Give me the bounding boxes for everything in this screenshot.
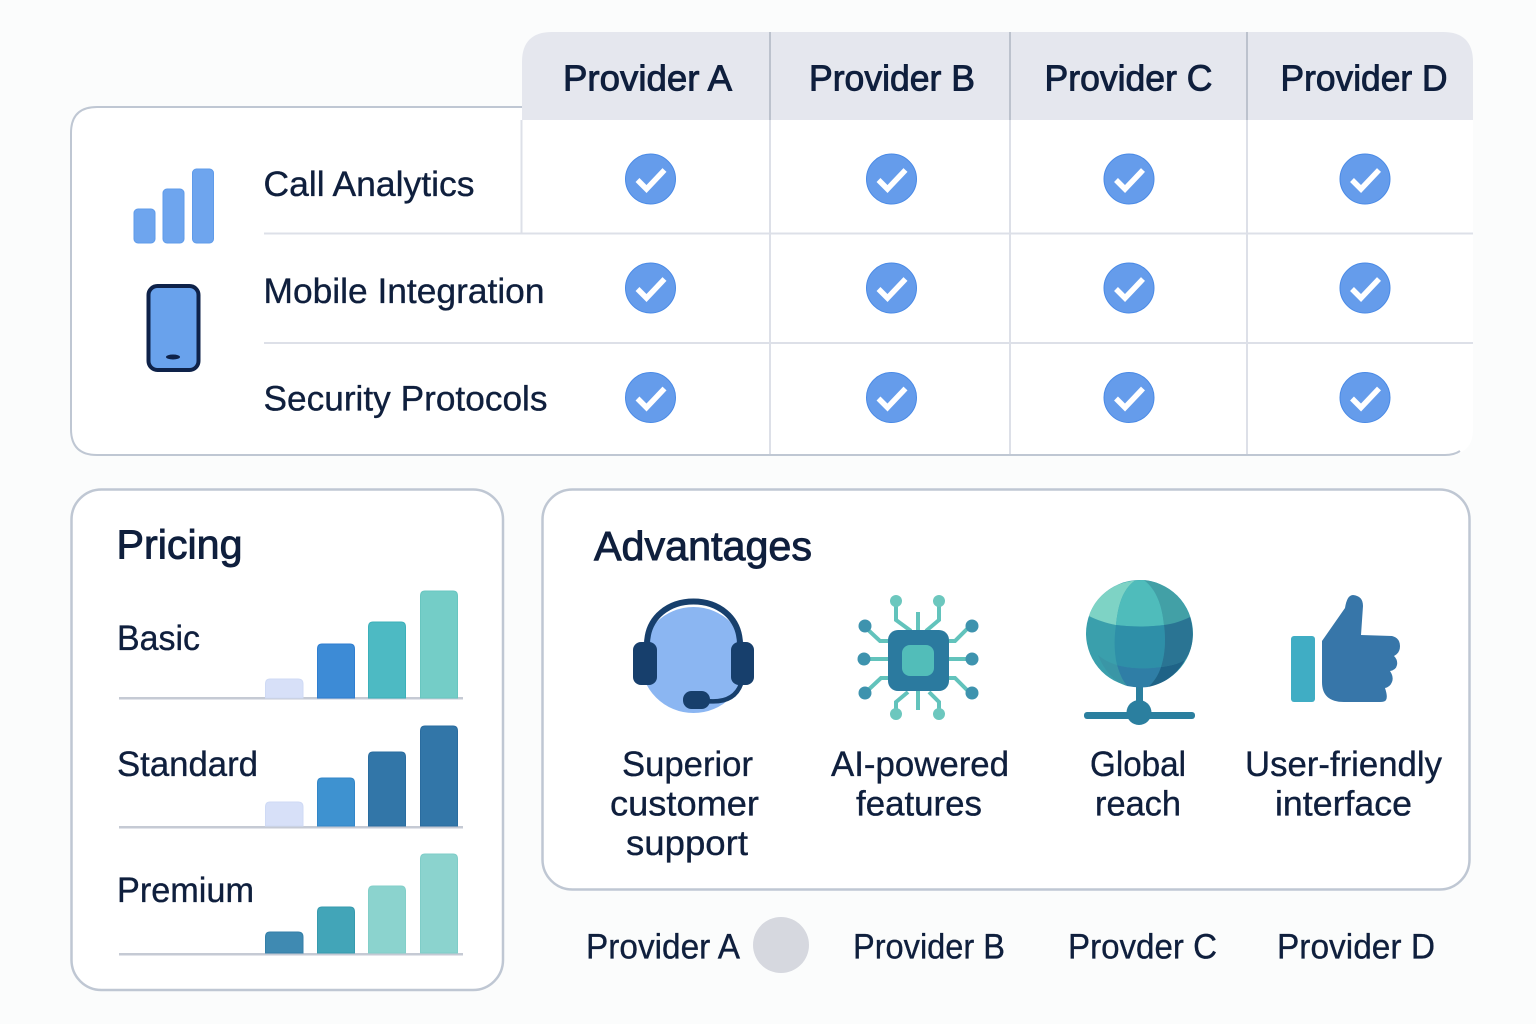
caption: user-friendly interface	[1245, 745, 1442, 824]
legend: Provider B	[853, 928, 1005, 966]
icon: signal bars	[134, 169, 214, 243]
row labels: Security Protocols	[264, 380, 548, 418]
tier: basic: Basic	[117, 619, 200, 658]
panel: advantages	[542, 490, 1470, 890]
icon: thumbs up	[1291, 595, 1400, 702]
caption: AI-powered features: features	[856, 784, 982, 824]
caption: global reach: reach	[1095, 784, 1181, 824]
icon: headset	[633, 602, 754, 713]
tier: standard	[117, 726, 463, 828]
row labels	[264, 165, 548, 418]
tier: standard: Standard	[117, 745, 258, 784]
caption: superior customer support: support	[626, 824, 748, 863]
tier: premium	[117, 854, 463, 956]
legend	[586, 917, 1435, 973]
caption: global reach	[1090, 745, 1186, 824]
tier: basic	[117, 591, 463, 700]
check marks	[626, 154, 1390, 422]
legend: Provider A	[586, 928, 741, 966]
tier: premium: Premium	[117, 871, 254, 910]
table header: Provider C	[1044, 58, 1212, 98]
legend: Provider D	[1277, 928, 1435, 966]
legend: Provder C	[1068, 928, 1217, 966]
caption: user-friendly interface: interface	[1275, 784, 1412, 824]
panel: feature comparison table	[71, 32, 1473, 455]
icon: AI chip	[858, 595, 978, 720]
caption: superior customer support: customer	[610, 784, 759, 824]
icon: mobile phone	[148, 286, 198, 370]
caption: AI-powered features	[831, 745, 1009, 824]
panel: pricing	[72, 490, 503, 990]
caption: user-friendly interface: User-friendly	[1245, 745, 1442, 784]
caption: superior customer support: Superior	[622, 745, 753, 784]
table header: Provider A	[563, 58, 732, 98]
table header: Provider D	[1280, 58, 1448, 98]
caption: global reach: Global	[1090, 745, 1186, 784]
table header: Provider B	[809, 58, 975, 98]
caption: AI-powered features: AI-powered	[831, 745, 1009, 784]
row labels: Call Analytics	[264, 165, 474, 204]
heading: pricing: Pricing	[116, 522, 242, 568]
heading: advantages: Advantages	[594, 523, 812, 569]
icon: globe network	[1084, 580, 1195, 725]
row labels: Mobile Integration	[264, 272, 544, 311]
caption: superior customer support	[610, 745, 759, 863]
table header	[522, 32, 1473, 120]
